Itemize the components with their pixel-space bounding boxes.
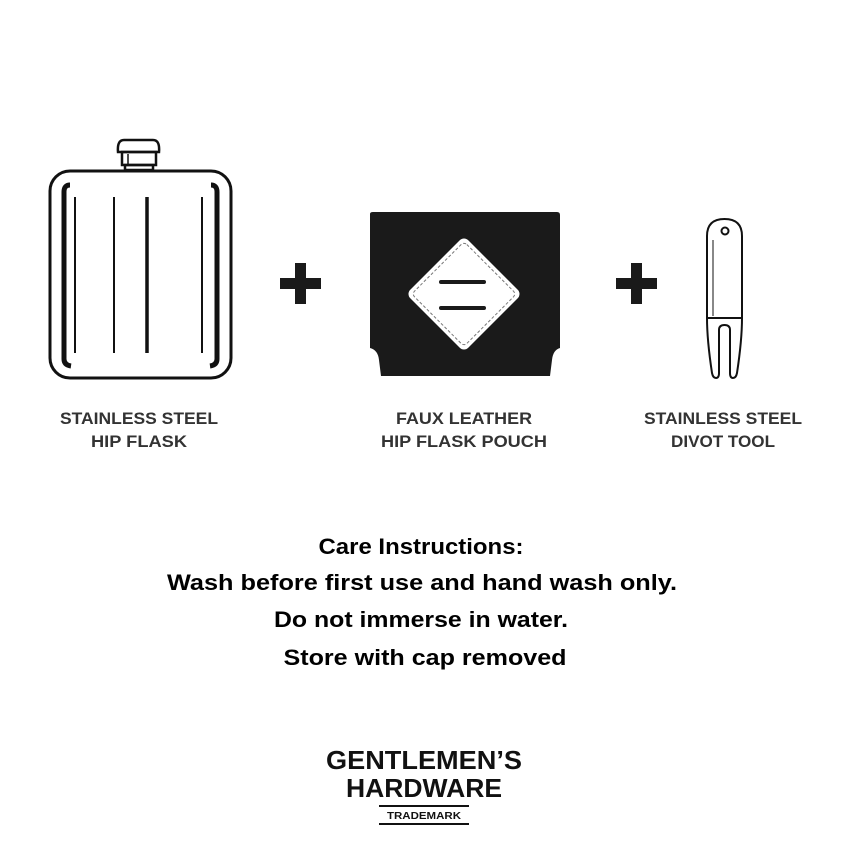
logo: Gentlemen's Hardware: GENTLEMEN’S [326, 745, 522, 775]
label: flask [60, 409, 218, 451]
care instructions text: Store with cap removed [284, 645, 566, 670]
care instructions text [167, 534, 677, 670]
logo: Gentlemen's Hardware [326, 745, 522, 824]
flask body [50, 171, 231, 378]
label: divot tool: DIVOT TOOL [671, 432, 775, 451]
label: pouch: FAUX LEATHER [396, 409, 532, 428]
care instructions text: Care Instructions: [318, 534, 524, 559]
care instructions text: Wash before first use and hand wash only. [167, 570, 677, 595]
icon: divot tool [707, 219, 742, 378]
icon: plus 2 [616, 263, 657, 304]
label: divot tool: STAINLESS STEEL [644, 409, 802, 428]
care instructions text: Do not immerse in water. [274, 607, 568, 632]
logo: Gentlemen's Hardware: HARDWARE [346, 773, 502, 803]
pouch diamond patch [406, 236, 522, 352]
icon: pouch [370, 212, 560, 376]
label: flask: STAINLESS STEEL [60, 409, 218, 428]
icon: plus 1 [280, 263, 321, 304]
logo: Gentlemen's Hardware: TRADEMARK [387, 811, 462, 822]
flask cap [118, 140, 159, 170]
label: pouch: HIP FLASK POUCH [381, 432, 547, 451]
label: divot tool [644, 409, 802, 451]
label: flask: HIP FLASK [91, 432, 188, 451]
icon: hip flask [50, 140, 231, 378]
label: pouch [381, 409, 547, 451]
